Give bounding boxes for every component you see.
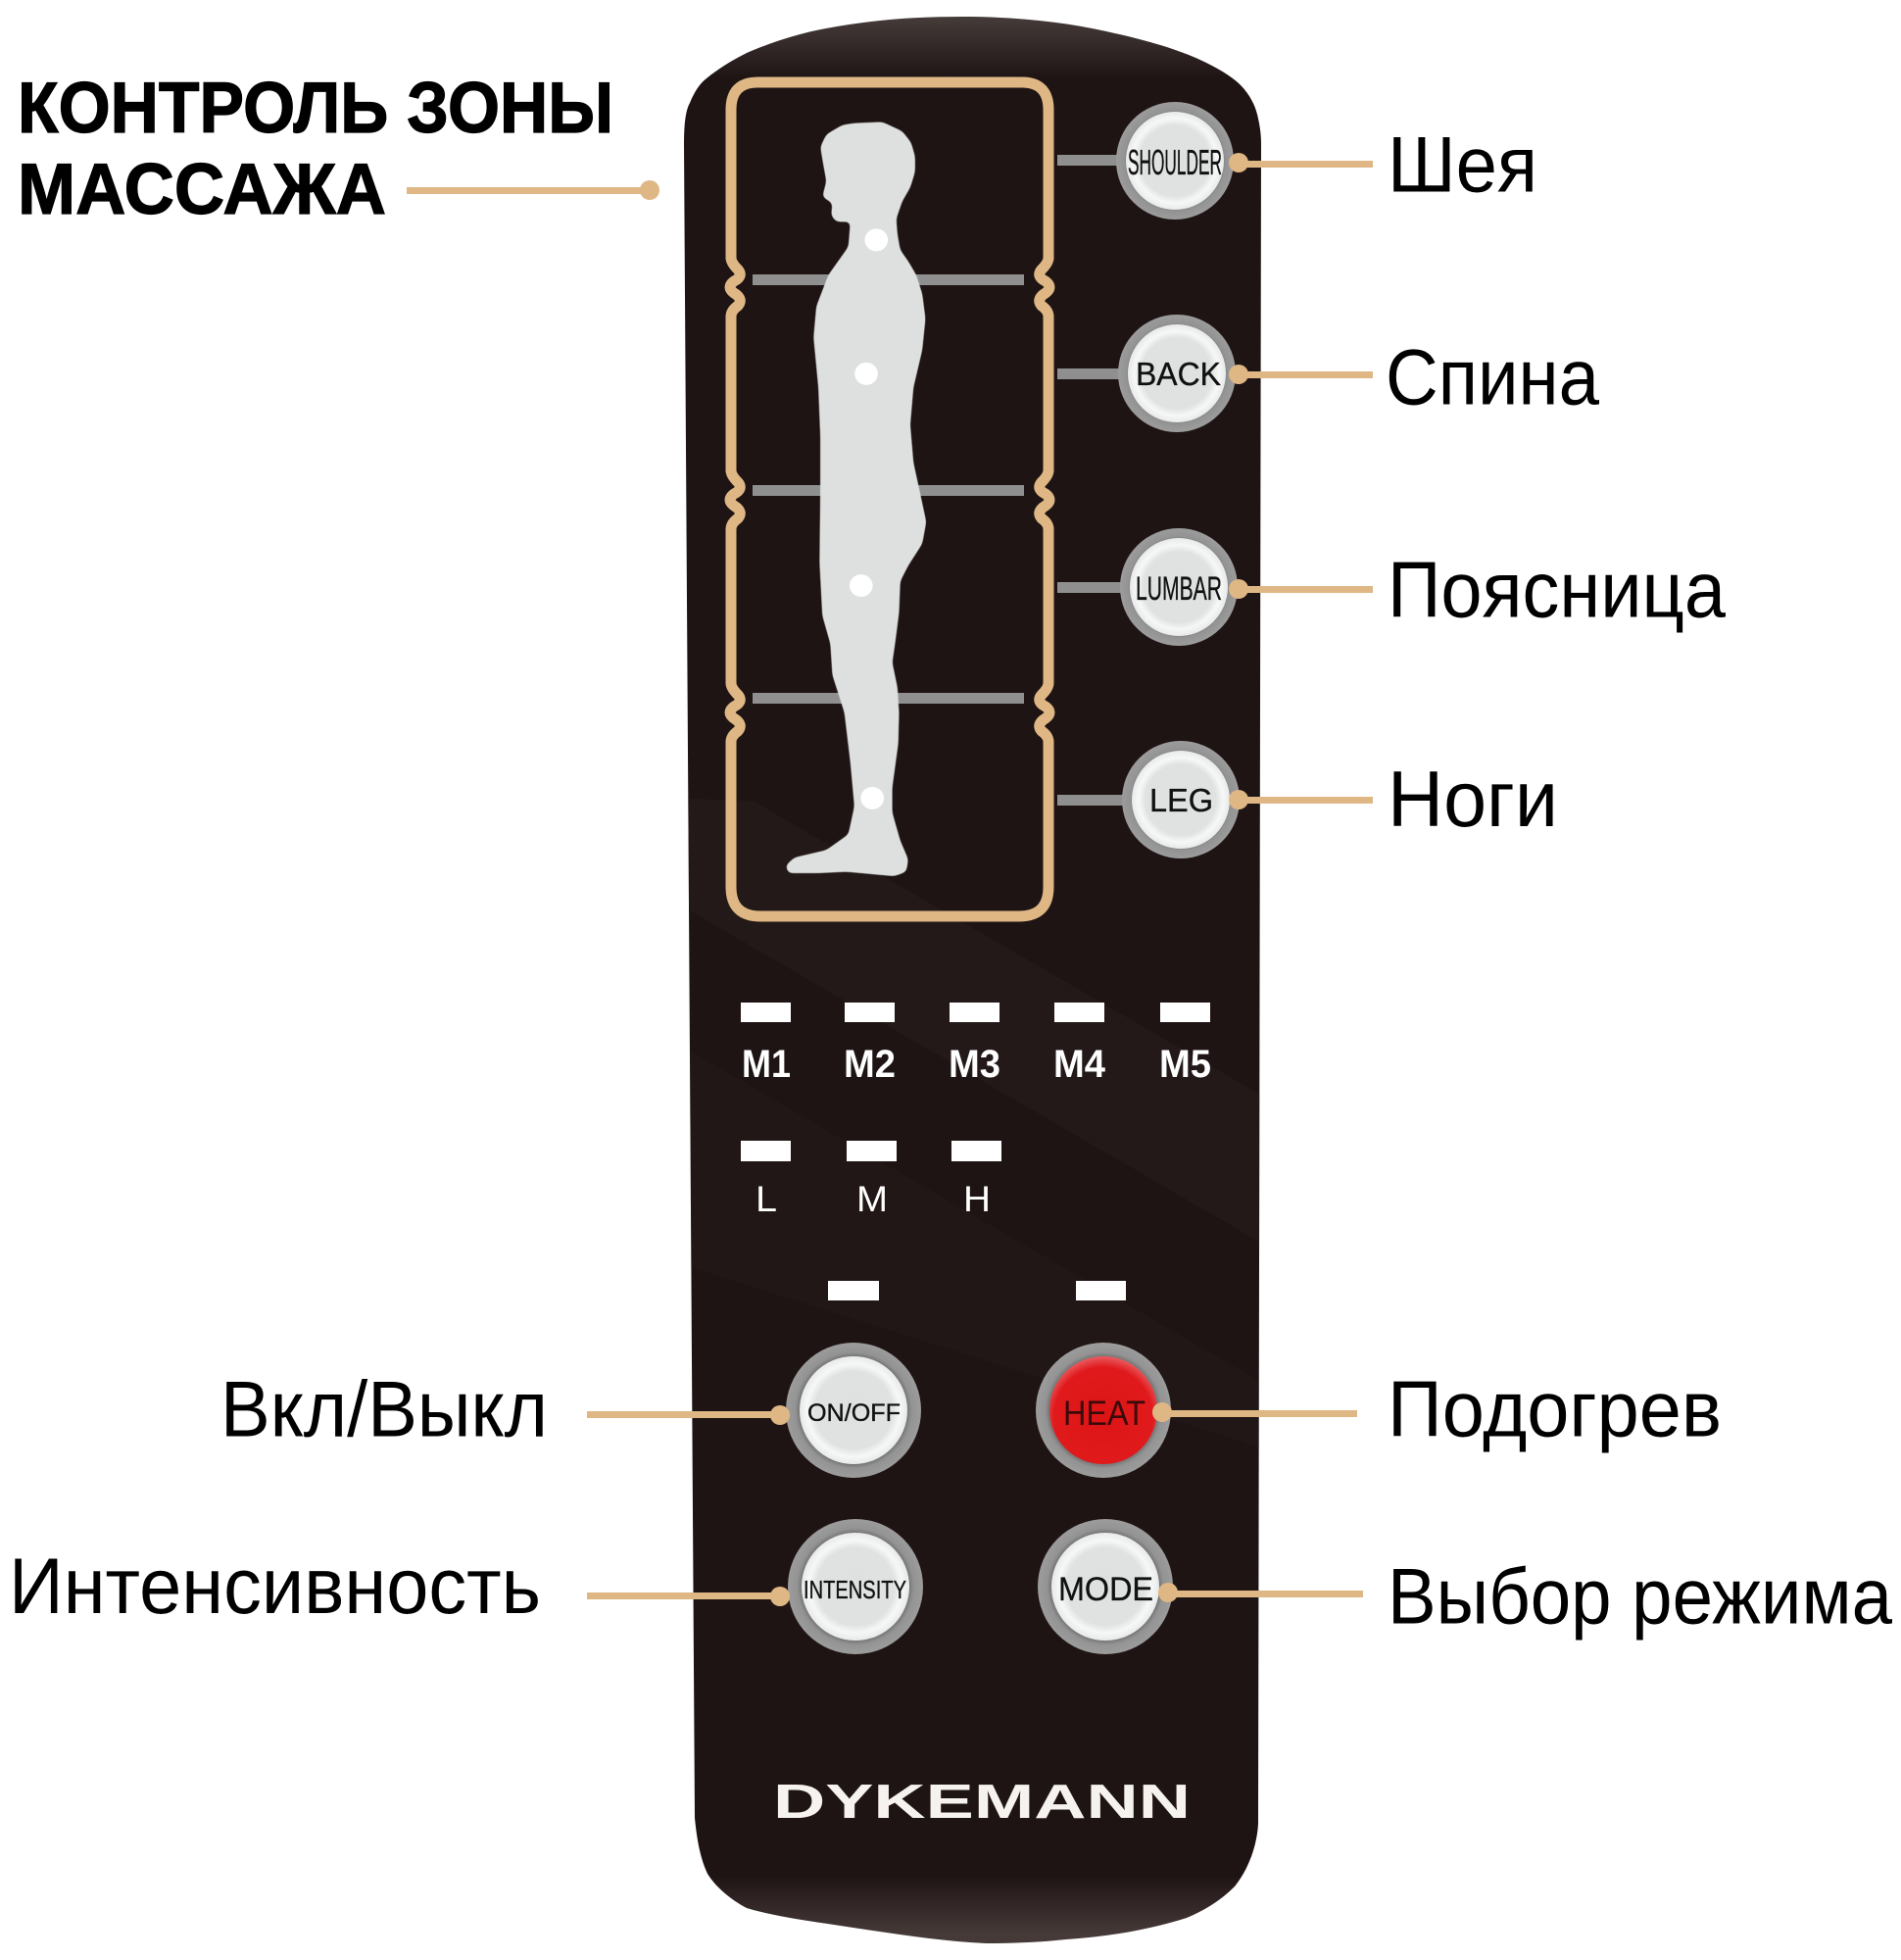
button: lumbar: LUMBAR xyxy=(1136,570,1222,608)
callout line: intensity xyxy=(587,1587,790,1606)
on/off and heat indicators xyxy=(828,1281,1126,1300)
button: shoulder: SHOULDER xyxy=(1128,142,1222,182)
button: mode: MODE xyxy=(1058,1571,1153,1608)
button: on/off xyxy=(786,1343,921,1478)
intensity indicators: M xyxy=(856,1179,888,1219)
title: massage zone control xyxy=(18,69,613,229)
body zone frame xyxy=(730,82,1049,916)
callout line: massage zone xyxy=(407,180,659,200)
label: back: Спина xyxy=(1386,333,1600,421)
label: neck: Шея xyxy=(1388,122,1537,210)
button: lumbar xyxy=(1120,528,1238,646)
title: massage zone control: КОНТРОЛЬ ЗОНЫ xyxy=(18,69,613,148)
callout line: lumbar xyxy=(1229,579,1373,599)
label: on/off: Вкл/Выкл xyxy=(220,1366,548,1454)
intensity indicators xyxy=(741,1141,1001,1219)
sheen bands on remote body xyxy=(681,799,1269,1450)
zone divider lines xyxy=(753,274,1024,704)
button: heat: HEAT xyxy=(1063,1395,1145,1433)
label: heat: Подогрев xyxy=(1388,1366,1722,1454)
callout line: mode xyxy=(1158,1583,1363,1602)
human silhouette xyxy=(786,122,926,876)
button: intensity: INTENSITY xyxy=(804,1575,906,1604)
callout line: heat xyxy=(1152,1402,1357,1422)
mode indicators: M1 xyxy=(742,1043,791,1086)
button: mode xyxy=(1038,1519,1173,1654)
mode indicators: M5 xyxy=(1159,1043,1211,1086)
button: back: BACK xyxy=(1136,356,1221,392)
button: leg: LEG xyxy=(1149,782,1213,818)
button: back xyxy=(1118,315,1236,432)
label: lumbar: Поясница xyxy=(1388,547,1727,635)
button: heat xyxy=(1036,1343,1171,1478)
callout line: back xyxy=(1229,365,1373,384)
remote control xyxy=(681,17,1269,1943)
callout line: on/off xyxy=(587,1405,790,1425)
remote body xyxy=(684,17,1261,1943)
button: shoulder xyxy=(1116,102,1234,220)
brand logo: DYKEMANN xyxy=(773,1776,1191,1829)
mode indicators: M2 xyxy=(844,1043,896,1086)
button connector stubs xyxy=(1057,155,1128,806)
intensity indicators: H xyxy=(963,1179,991,1219)
mode indicators: M4 xyxy=(1053,1043,1106,1086)
label: legs: Ноги xyxy=(1388,756,1558,844)
button: intensity xyxy=(788,1519,923,1654)
label: intensity: Интенсивность xyxy=(9,1543,541,1631)
mode indicators xyxy=(741,1003,1211,1086)
intensity indicators: L xyxy=(756,1179,777,1219)
title: massage zone control: МАССАЖА xyxy=(18,150,386,229)
callout line: legs xyxy=(1229,790,1373,809)
button: on/off: ON/OFF xyxy=(807,1399,901,1427)
callout line: neck xyxy=(1229,153,1373,172)
button: leg xyxy=(1122,741,1240,858)
mode indicators: M3 xyxy=(949,1043,1000,1086)
